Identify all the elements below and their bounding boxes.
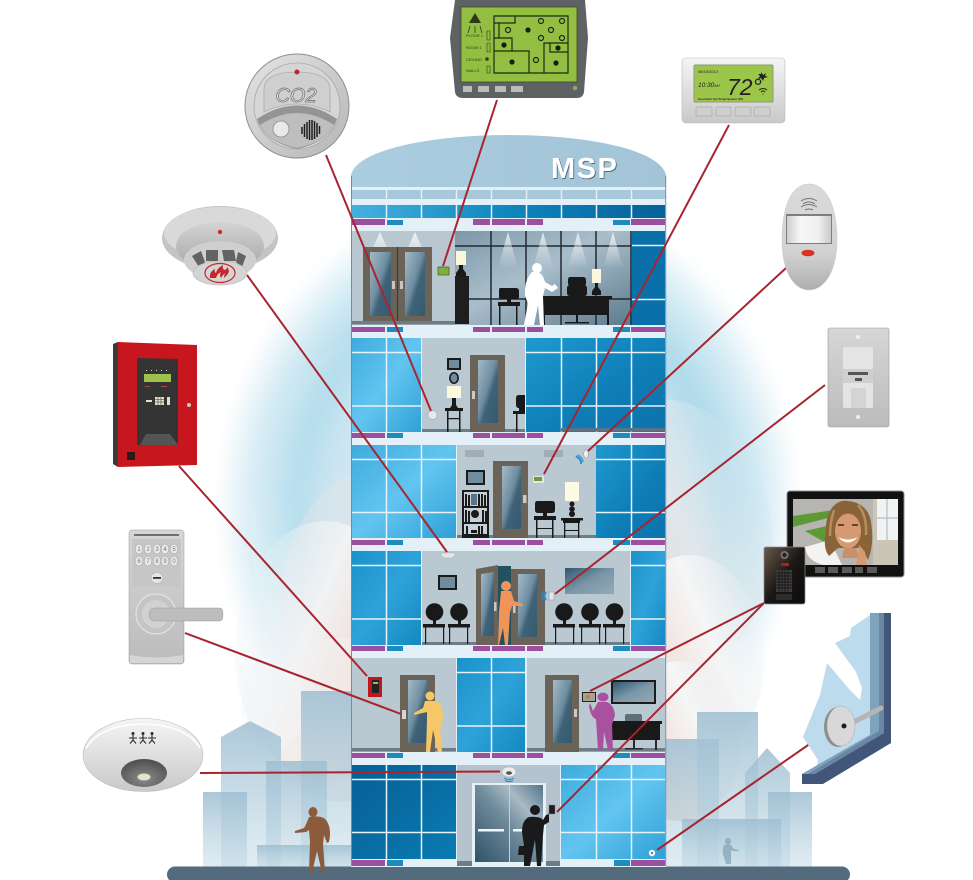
device: keypad door lock: 9 (163, 559, 167, 565)
purple person (589, 692, 615, 750)
floor 6: lobby (352, 765, 665, 866)
rod (854, 708, 881, 722)
device: touchscreen control panel: WALLS (466, 68, 480, 73)
glass office (455, 231, 632, 325)
trim strips (352, 219, 665, 866)
ceiling lights (371, 232, 623, 268)
sensor disc (824, 707, 852, 747)
door station on wall (549, 805, 555, 814)
right office (527, 658, 665, 752)
glass break sensor (649, 850, 655, 856)
desk and chair (609, 714, 662, 750)
chair (534, 501, 556, 538)
door left (400, 675, 435, 752)
left windows (352, 765, 456, 859)
window bars (455, 231, 631, 325)
left windows (352, 551, 421, 645)
device: ceiling people-counting sensor (83, 718, 203, 792)
device: wall switch occupancy sensor (828, 328, 889, 427)
device: touchscreen control panel: CEILING (466, 57, 482, 62)
thermostat on wall (533, 476, 544, 483)
double doors (363, 247, 432, 324)
device: smoke detector (162, 206, 278, 285)
device: keypad door lock: 6 (137, 559, 141, 565)
device: fire alarm control panel (113, 342, 197, 467)
touchscreen on wall (438, 267, 449, 275)
city skyline right (666, 712, 812, 867)
executive desk with chair and lamp (542, 269, 612, 325)
device: keypad door lock: 5 (172, 547, 176, 553)
door (493, 461, 528, 538)
occupancy sensor on ceiling (502, 767, 516, 782)
device: keypad door lock: 3 (155, 547, 159, 553)
middle windows (457, 658, 525, 752)
attic row windows (352, 190, 665, 218)
person white silhouette (524, 263, 558, 325)
right windows (596, 445, 665, 538)
broken window pane (803, 615, 870, 770)
picture, mirror, lamp and table (445, 358, 463, 432)
wall TV (611, 680, 656, 704)
device: CO2 detector (245, 54, 349, 158)
monitor screen showing visitor (793, 499, 898, 565)
building body base (351, 187, 666, 867)
cabinet and lamp (455, 251, 469, 324)
device: video intercom monitor (787, 491, 904, 577)
ceiling vents (465, 450, 563, 457)
device: CO2 detector: CO2 (275, 85, 317, 107)
wall screen (565, 568, 614, 594)
chair (513, 395, 525, 432)
left windows (352, 445, 456, 538)
device: glass break sensor on window (802, 613, 891, 784)
door (470, 355, 505, 432)
floor 5: offices (351, 658, 665, 752)
lobby wall (352, 231, 456, 325)
open double doors (476, 565, 545, 645)
device: keypad door lock: 1 (137, 547, 141, 553)
floor 4: waiting room (352, 551, 665, 645)
road (167, 866, 850, 880)
door right (545, 675, 579, 752)
floor 2: CO2 room (352, 338, 665, 432)
heading: MSP: MSP (551, 153, 618, 185)
motion sensor on wall (576, 450, 588, 464)
device: digital thermostat: 10:30AM (698, 82, 720, 89)
chair (498, 288, 520, 325)
device: keypad door lock: 2 (146, 547, 150, 553)
device: keypad door lock: 8 (155, 559, 159, 565)
distant person silhouette (723, 838, 739, 864)
smoke detector on ceiling (441, 553, 455, 558)
brown person outside (295, 807, 330, 873)
picture (438, 575, 457, 590)
device: digital thermostat: 08/15/2013 (698, 69, 719, 74)
right windows (526, 338, 665, 432)
device: keypad door lock: 7 (146, 559, 150, 565)
yellow person (414, 692, 443, 752)
device: door station (764, 547, 805, 604)
lamp and side table (561, 482, 583, 538)
device: touchscreen control panel: ROOM 1 (466, 45, 483, 50)
device: digital thermostat: Cool Auto Set Temp Sensor ON (698, 97, 743, 101)
right windows (561, 765, 665, 859)
right windows (631, 551, 665, 645)
building side edges (352, 176, 666, 866)
orange person (498, 581, 523, 645)
device: digital thermostat (682, 58, 785, 123)
connector lines from devices to building (179, 100, 825, 850)
left windows (352, 338, 421, 432)
device: keypad door lock: 0 (172, 559, 176, 565)
background: blue glow and clouds behind building (224, 248, 792, 821)
fire panel on wall (368, 677, 382, 697)
entrance glass doors (472, 783, 546, 866)
device: touchscreen control panel (450, 0, 588, 98)
right window column (632, 231, 665, 325)
device: keypad door lock (129, 530, 223, 664)
building (351, 135, 666, 867)
device: digital thermostat: 72° (727, 74, 762, 100)
dome roof with MSP sign (351, 135, 666, 188)
waiting chairs (423, 603, 625, 644)
device: keypad door lock: 4 (163, 547, 167, 553)
window frame and sill (802, 613, 891, 784)
floor plan (494, 16, 568, 73)
device: touchscreen control panel: FLOOR 1 (466, 33, 484, 38)
city skyline left (203, 691, 351, 867)
device: PIR motion sensor (782, 184, 837, 290)
wall switch sensor (542, 591, 554, 601)
woman with briefcase (518, 805, 549, 866)
floor 1: executive office (352, 231, 665, 325)
CO2 detector on wall (428, 410, 437, 420)
bookshelf (462, 490, 489, 538)
floor 3: reception (352, 445, 665, 538)
keypad digits (135, 544, 178, 566)
picture (466, 470, 485, 485)
left office (351, 658, 456, 752)
video monitor on wall (582, 692, 596, 702)
